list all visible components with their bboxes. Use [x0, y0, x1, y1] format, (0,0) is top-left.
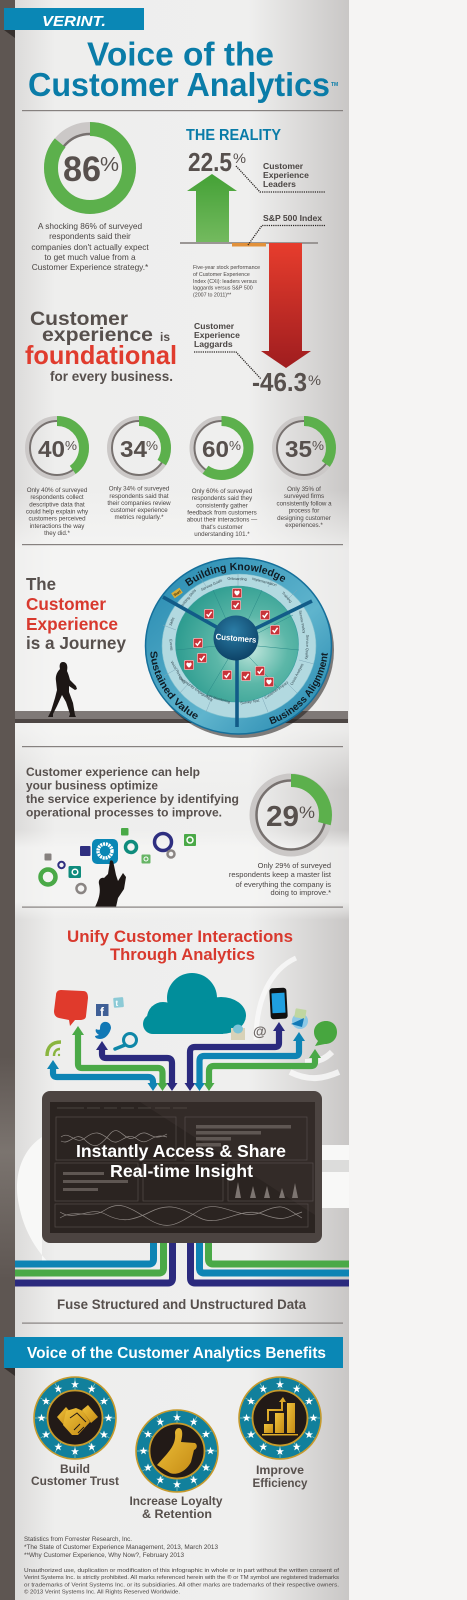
footnotes: *The State of Customer Experience Management, 2013, March 2013: [24, 1544, 219, 1551]
text: 35 percent: consistently follow a: [276, 500, 332, 508]
ring labels: Implementation: [252, 577, 277, 587]
caption: fuse data: Fuse Structured and Unstructured Data: [57, 1297, 306, 1312]
icon: twitter tile: t: [116, 999, 118, 1008]
ring labels: Training: [281, 591, 293, 604]
text: 35 percent: designing customer: [277, 515, 331, 522]
donut: 60 percent: [192, 418, 252, 478]
badge: improve efficiency: [239, 1377, 321, 1490]
icon: gears and pointing hand: [40, 828, 196, 907]
text: 60 percent: Only 60% of surveyed: [192, 488, 253, 495]
heading: unify customer interactions: Unify Customer Interactions: [67, 927, 293, 946]
chart: the reality: Laggards: [194, 339, 233, 349]
ring labels: Cross Analysis: [290, 663, 305, 686]
analytics screen: [42, 1091, 322, 1243]
ring labels: Survey Test: [240, 699, 260, 705]
text: 60 percent: understanding 101.*: [194, 531, 250, 538]
start flag: Start: [173, 589, 182, 597]
text: 40 percent: customers perceived: [28, 516, 86, 522]
chart: the reality: [180, 127, 325, 397]
legal text: © 2013 Verint Systems Inc. All Rights Reserved Worldwide.: [24, 1588, 180, 1596]
text: 86 percent description: [31, 221, 149, 272]
icon: email envelope: [231, 1024, 245, 1040]
heading: the customer experience is a journey: is a Journey: [26, 633, 126, 653]
analytics screen: Real-time Insight: [110, 1161, 253, 1181]
badge: increase loyalty and retention: Increase Loyalty: [130, 1494, 223, 1508]
statement: customer experience is foundational: experience: [42, 325, 153, 346]
donut: 34 percent: [109, 418, 169, 478]
analytics screen: Instantly Access & Share: [76, 1141, 286, 1161]
donut: 29 percent: 29: [266, 801, 299, 833]
text: 35 percent: Only 35% of: [287, 486, 321, 493]
ring labels: Events: [169, 639, 173, 651]
badge: improve efficiency: Improve: [256, 1463, 304, 1477]
panel background: [15, 0, 349, 1600]
text: 40 percent: respondents collect: [30, 494, 84, 501]
chart: the reality: Customer: [263, 161, 304, 171]
data pipes below screen: [15, 1243, 349, 1283]
donut: 29 percent: %: [299, 803, 315, 822]
donut: 29 percent: [252, 776, 330, 854]
title: TM: [331, 82, 338, 88]
icon: magnifier: [115, 1034, 136, 1049]
chart: the reality: -46.3: [252, 367, 307, 397]
icon: smartphone: [269, 988, 288, 1019]
legal text: Verint Systems Inc. is strictly prohibited. All marks referenced herein with the ® or TM symbol are registered trademarks: [24, 1574, 339, 1581]
ring labels: Customer Impact: [264, 680, 289, 700]
curved labels: Business Alignment: [269, 652, 328, 724]
donut: 34 percent: 34: [120, 436, 147, 462]
icon: green speech bubble: [314, 1021, 337, 1046]
chart: the reality: %: [308, 372, 321, 388]
text: 34 percent: Only 34% of surveyed: [109, 486, 170, 492]
arrow: green left: [72, 1026, 168, 1091]
donut: 34 percent: %: [146, 438, 158, 453]
chart: the reality: S&P 500 Index: [263, 213, 322, 223]
text: optimize the service experience: Customer experience can help: [26, 765, 200, 779]
left dark band: [0, 0, 15, 1600]
hub: customers: [214, 616, 258, 660]
heading: the customer experience is a journey: [26, 574, 126, 653]
footnotes: [24, 1536, 219, 1559]
icon: walking person: [48, 662, 77, 717]
text: 29 percent description: [229, 861, 332, 897]
check boxes: [184, 588, 280, 687]
hub: customers: Customers: [215, 632, 257, 645]
ring labels: KPI Monitoring: [206, 694, 230, 704]
donut: 35 percent: [274, 418, 334, 478]
ring labels: Skills: [169, 617, 175, 626]
arrow: green right: [204, 1049, 321, 1091]
curved labels: [150, 562, 328, 724]
title: Voice of the: [87, 36, 274, 72]
statement: customer experience is foundational: for every business.: [50, 369, 173, 384]
text: 34 percent: customer experience: [110, 507, 168, 514]
text: 35 percent: process for: [289, 508, 319, 514]
text: 34 percent: [107, 486, 171, 521]
badge: build customer trust: Customer Trust: [31, 1474, 119, 1488]
icon: globe email: [291, 1008, 308, 1029]
donut: 40 percent: %: [65, 438, 77, 453]
donut: 60 percent: 60: [202, 436, 229, 462]
text: 29 percent description: doing to improve.*: [271, 888, 331, 897]
chart: the reality: of Customer Experience: [193, 272, 250, 278]
text: 40 percent: descriptive data that: [29, 502, 85, 508]
text: 34 percent: metrics regularly.*: [114, 514, 164, 521]
ring labels: Onboarding: [227, 577, 247, 581]
text: 86 percent description: Customer Experience strategy.*: [32, 262, 149, 272]
legal text: [24, 1568, 340, 1596]
heading: the customer experience is a journey: Customer: [26, 594, 106, 614]
Verint logo banner: VERINT.: [42, 14, 106, 30]
Verint logo banner: [4, 8, 144, 38]
heading: the customer experience is a journey: Experience: [26, 614, 118, 634]
statement: customer experience is foundational: foundational: [25, 340, 177, 370]
icon: bird: [95, 1022, 111, 1039]
ring labels: Voice Research: [170, 660, 186, 685]
icon: thumbs up: [157, 1428, 197, 1474]
text: 40 percent: [26, 487, 89, 537]
title: [28, 36, 338, 103]
text: 60 percent: consistently gather: [196, 502, 248, 510]
ring labels: Building Skills: [179, 588, 197, 608]
text: 40 percent: interactions the way: [30, 523, 85, 530]
ring labels: [169, 577, 309, 705]
icon: cloud: [143, 973, 246, 1034]
text: 86 percent description: companies don't actually expect: [31, 242, 149, 252]
text: 29 percent description: respondents keep a master list: [229, 870, 332, 879]
legal text: or trademarks of Verint Systems Inc. or its subsidiaries. All other marks are trademarks of their respective owners.: [24, 1582, 339, 1588]
arrow: blue right: [194, 1032, 305, 1091]
icon: facebook: f: [100, 1005, 105, 1019]
ring labels: Service Goals: [200, 578, 223, 592]
legal text: Unauthorized use, duplication or modification of this infographic in whole or in part without the written consent of: [24, 1568, 340, 1574]
statement: customer experience is foundational: Customer: [30, 309, 129, 330]
text: optimize the service experience: operational processes to improve.: [26, 806, 222, 820]
curved labels: Building Knowledge: [184, 562, 286, 586]
text: 60 percent: respondents said they: [192, 495, 253, 502]
text: 60 percent: [187, 488, 258, 538]
text: 29 percent description: of everything the company is: [236, 880, 331, 889]
text: 86 percent description: to get much value from a: [44, 252, 136, 262]
icon: twitter tile: [113, 997, 124, 1008]
text: 86 percent description: A shocking 86% of surveyed: [38, 221, 143, 231]
text: 60 percent: about their interactions —: [187, 516, 258, 524]
text: 29 percent description: Only 29% of surveyed: [258, 861, 331, 870]
donut: 40 percent: 40: [38, 436, 65, 462]
donut: 86 percent: 86: [63, 150, 101, 189]
chart: the reality: 22.5: [188, 147, 232, 177]
chart: the reality: Five-year stock performance: [193, 265, 260, 271]
heading: the customer experience is a journey: The: [26, 574, 56, 594]
badge: improve efficiency: Efficiency: [252, 1476, 308, 1490]
donut: 35 percent: 35: [285, 436, 312, 462]
text: 60 percent: that's customer: [201, 524, 243, 531]
badge: build customer trust: [31, 1377, 119, 1488]
donut: 35 percent: %: [312, 438, 324, 453]
text: 34 percent: respondents said that: [109, 493, 169, 500]
donut: 40 percent: [27, 418, 87, 478]
icon: wifi: [47, 1042, 61, 1056]
text: 86 percent description: respondents said their: [49, 231, 131, 241]
badge: build customer trust: Build: [60, 1462, 90, 1476]
statement: customer experience is foundational: is: [160, 330, 170, 344]
text: optimize the service experience: the service experience by identifying: [26, 792, 239, 806]
ring labels: Community Engagement: [178, 676, 213, 702]
start flag: [171, 588, 183, 598]
text: 40 percent: could help explain why: [26, 508, 89, 516]
chart: the reality: laggards versus S&P 500: [193, 286, 253, 292]
footnotes: **Why Customer Experience, Why Now?, February 2013: [24, 1552, 185, 1559]
chart: the reality: Experience: [194, 330, 240, 340]
text: optimize the service experience: your business optimize: [26, 778, 158, 792]
icon: red speech bubble: [54, 990, 88, 1026]
chart: the reality: Experience: [263, 170, 309, 180]
icon: bar chart rising: [262, 1397, 298, 1436]
text: 34 percent: their companies review: [107, 500, 171, 507]
heading: unify customer interactions: Through Analytics: [110, 945, 255, 964]
curved labels: Sustained Value: [150, 652, 198, 719]
chart: the reality: Leaders: [263, 179, 296, 189]
arrow: blue left: [47, 1060, 158, 1091]
statement: customer experience is foundational: [25, 309, 177, 384]
badge: increase loyalty and retention: & Retention: [142, 1507, 212, 1521]
text: optimize the service experience: [26, 765, 239, 820]
wheel spokes: [163, 597, 312, 727]
text: 40 percent: they did.*: [44, 530, 70, 537]
icon: at sign: @: [253, 1023, 267, 1039]
chart: the reality: Customer: [194, 321, 235, 331]
chart: the reality: Index (CXi): leaders versus: [193, 279, 257, 285]
text: 60 percent: feedback from customers: [187, 510, 257, 516]
text: 40 percent: Only 40% of surveyed: [27, 487, 88, 494]
donut: 86 percent: [50, 128, 130, 208]
ring labels: Service Quality: [305, 635, 309, 660]
chart: the reality: THE REALITY: [186, 127, 281, 144]
title: Customer Analytics: [28, 66, 330, 103]
arrow: navy left: [96, 1041, 178, 1091]
chart: the reality: %: [233, 150, 246, 166]
arrow: navy right: [184, 1022, 285, 1091]
heading: unify customer interactions: [67, 927, 293, 964]
benefits banner: Voice of the Customer Analytics Benefits: [27, 1345, 326, 1362]
chart: the reality: (2007 to 2011)**: [193, 292, 231, 298]
badge: increase loyalty and retention: [130, 1410, 223, 1521]
text: 35 percent: [276, 486, 332, 529]
arrows: data flowing to channels: [47, 1022, 321, 1091]
donut: 60 percent: %: [229, 438, 241, 453]
donut: 86 percent: %: [100, 154, 119, 176]
ring labels: Service Policy: [298, 610, 306, 634]
text: 35 percent: experiences.*: [285, 522, 323, 529]
icon: handshake: [57, 1405, 98, 1435]
icon: facebook: [96, 1004, 108, 1019]
ground strip: [15, 711, 348, 723]
benefits banner: [4, 1337, 343, 1376]
text: 35 percent: surveyed firms: [284, 493, 324, 500]
footnotes: Statistics from Forrester Research, Inc.: [24, 1536, 132, 1543]
diagram: customer journey wheel: [144, 557, 334, 738]
